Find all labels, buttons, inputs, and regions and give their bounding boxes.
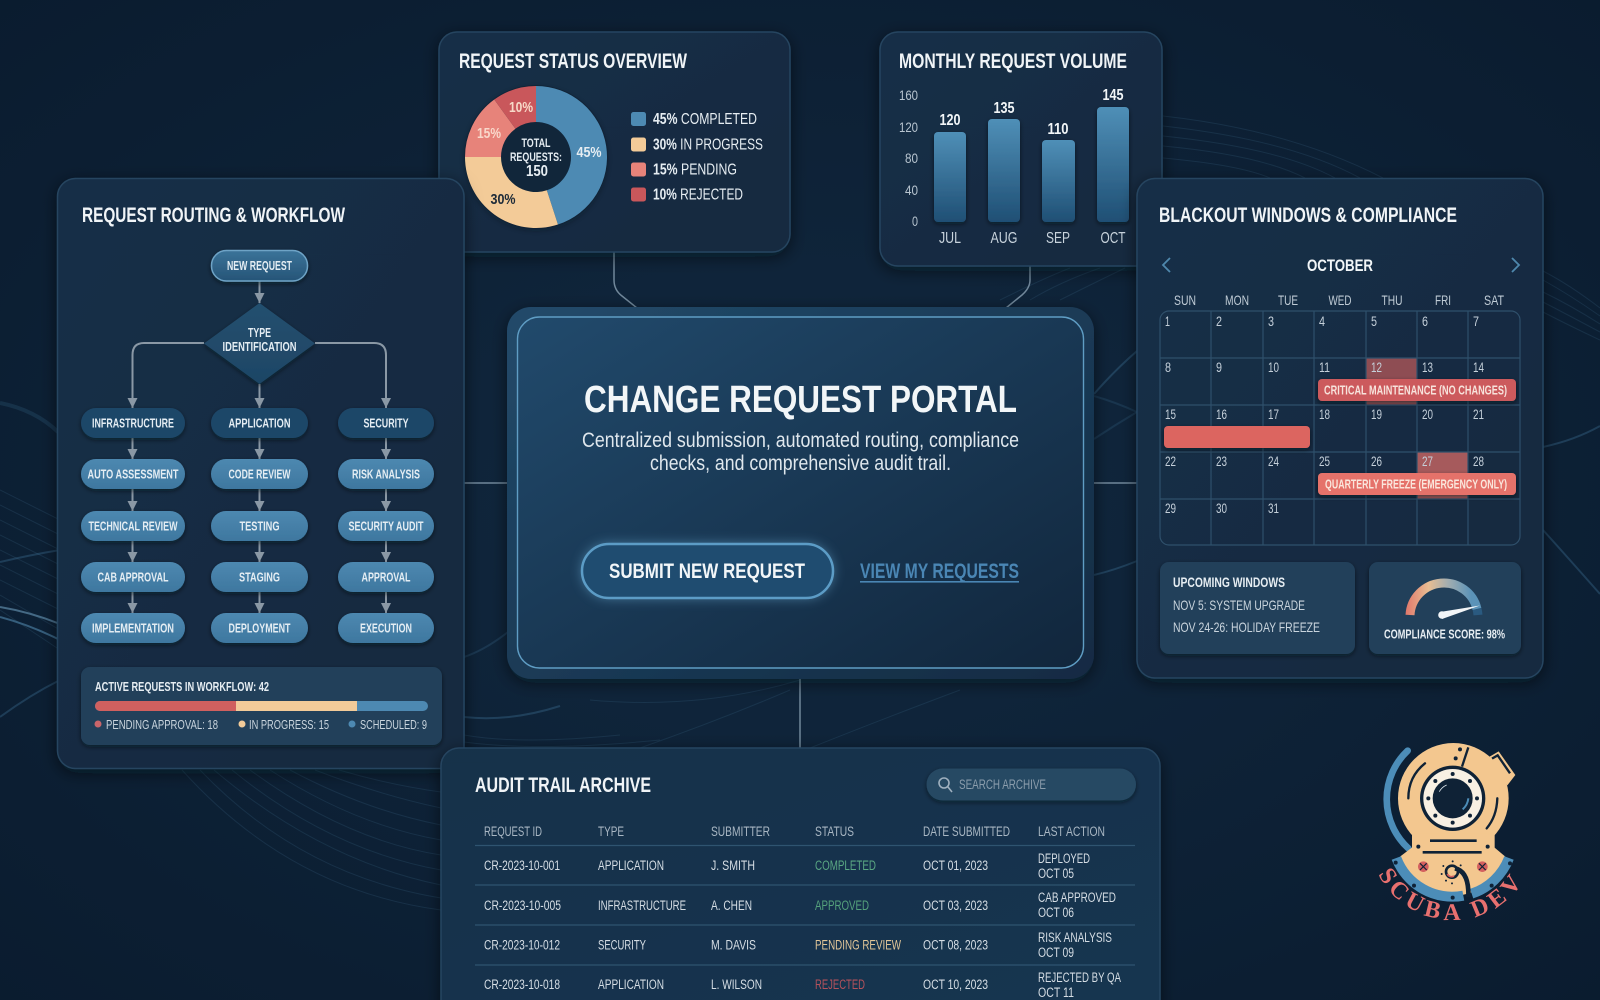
arrows: flow connectors (132, 281, 386, 613)
node: type identification (204, 303, 315, 384)
subtitle: checks, and comprehensive audit trail. (650, 452, 951, 475)
bar chart: AUG (990, 230, 1018, 247)
panel: request routing and workflow (58, 178, 464, 768)
row: CR-2023-10-018: L. WILSON (711, 977, 762, 992)
y axis labels: 0 (912, 213, 918, 229)
column: infrastructure: CAB APPROVAL (98, 570, 169, 584)
blackout: quarterly freeze: QUARTERLY FREEZE (EMERGENCY ONLY) (1325, 478, 1507, 492)
compliance gauge: COMPLIANCE SCORE: 98% (1384, 626, 1505, 642)
column: security: SECURITY AUDIT (348, 520, 424, 534)
subtitle (582, 429, 1019, 475)
column: infrastructure (81, 408, 185, 643)
row: CR-2023-10-001: DEPLOYED (1038, 851, 1090, 866)
row: CR-2023-10-012: SECURITY (598, 938, 646, 952)
table header (484, 824, 1105, 839)
active requests summary: SCHEDULED: 9 (360, 717, 427, 732)
upcoming windows: NOV 24-26: HOLIDAY FREEZE (1173, 619, 1320, 635)
search box (926, 768, 1136, 800)
calendar dates: 25 (1319, 454, 1330, 469)
blackout: critical maintenance: CRITICAL MAINTENANCE (NO CHANGES) (1324, 384, 1507, 398)
weekday headers: TUE (1278, 292, 1298, 308)
logo text: SCUBA DEV (1379, 868, 1518, 920)
audit table (475, 824, 1135, 1000)
active requests summary: ACTIVE REQUESTS IN WORKFLOW: 42 (95, 679, 269, 694)
calendar navigation (1163, 256, 1519, 275)
blackout: critical maintenance (1318, 379, 1516, 401)
button: submit new request: SUBMIT NEW REQUEST (609, 559, 805, 583)
row: CR-2023-10-012: M. DAVIS (711, 938, 756, 952)
donut chart: 10% (509, 99, 533, 116)
row: CR-2023-10-005: APPROVED (815, 898, 869, 913)
bar chart: OCT (1100, 230, 1126, 247)
icon: porthole (1420, 766, 1485, 831)
column: infrastructure: AUTO ASSESSMENT (88, 468, 179, 482)
row: CR-2023-10-012: CR-2023-10-012 (484, 938, 560, 952)
donut chart: 45% (576, 144, 602, 161)
bar chart (899, 87, 1129, 247)
button: submit new request (582, 544, 833, 598)
column: infrastructure: INFRASTRUCTURE (92, 416, 174, 430)
donut chart (464, 85, 608, 229)
donut chart: REQUESTS: (510, 150, 562, 164)
bar chart: JUL (939, 230, 961, 247)
row: CR-2023-10-001: OCT 01, 2023 (923, 858, 988, 873)
calendar dates: 3 (1268, 314, 1274, 329)
chart legend: 15% PENDING (653, 162, 737, 178)
calendar dates: 6 (1422, 314, 1428, 329)
row: CR-2023-10-018: APPLICATION (598, 977, 664, 992)
y axis labels: 40 (905, 182, 918, 198)
row: CR-2023-10-018: OCT 10, 2023 (923, 977, 988, 992)
node: type identification: TYPE (248, 326, 271, 340)
upcoming windows: NOV 5: SYSTEM UPGRADE (1173, 597, 1305, 613)
row: CR-2023-10-001: APPLICATION (598, 858, 664, 873)
row: CR-2023-10-001: CR-2023-10-001 (484, 858, 560, 873)
calendar dates: 29 (1165, 501, 1176, 516)
bar chart: 145 (1102, 87, 1124, 104)
icon: top handle (1488, 751, 1515, 785)
bar chart: SEP (1046, 230, 1070, 247)
row: CR-2023-10-018: REJECTED BY QA (1038, 970, 1121, 985)
calendar dates: 30 (1216, 501, 1227, 516)
weekday headers: MON (1225, 292, 1249, 308)
compliance gauge (1369, 562, 1521, 654)
row: CR-2023-10-005: A. CHEN (711, 898, 752, 913)
y axis labels: 80 (905, 150, 918, 166)
weekday headers: THU (1382, 292, 1402, 308)
logo: scuba dev diving helmet (1379, 743, 1518, 920)
column: application (211, 408, 308, 643)
calendar dates: 28 (1473, 454, 1484, 469)
calendar dates: 4 (1319, 314, 1325, 329)
calendar dates: 5 (1371, 314, 1377, 329)
column: application: CODE REVIEW (228, 468, 291, 482)
column: security: SECURITY (364, 416, 409, 430)
donut chart: 150 (526, 163, 548, 180)
heading: blackout windows and compliance: BLACKOUT WINDOWS & COMPLIANCE (1159, 204, 1457, 227)
node: new request (212, 250, 308, 281)
calendar dates: 19 (1371, 407, 1382, 422)
column: security: RISK ANALYSIS (352, 468, 420, 482)
icon: collar band (1394, 858, 1512, 900)
row: CR-2023-10-012: OCT 09 (1038, 945, 1074, 960)
chart legend: 30% IN PROGRESS (653, 136, 763, 154)
active requests summary: PENDING APPROVAL: 18 (106, 717, 218, 732)
calendar dates: 16 (1216, 407, 1227, 422)
table header: LAST ACTION (1038, 824, 1105, 839)
calendar dates: 11 (1319, 360, 1330, 375)
donut chart: 15% (477, 125, 501, 142)
column: application: APPLICATION (228, 416, 290, 430)
calendar dates: 8 (1165, 360, 1171, 375)
upcoming windows: UPCOMING WINDOWS (1173, 575, 1285, 590)
calendar dates: 17 (1268, 407, 1279, 422)
calendar dates: 7 (1473, 314, 1479, 329)
panel: change request portal hero (507, 307, 1094, 679)
calendar dates: 18 (1319, 407, 1330, 422)
row: CR-2023-10-001: J. SMITH (711, 858, 755, 873)
progress bar (95, 701, 428, 711)
calendar dates: 2 (1216, 314, 1222, 329)
active requests summary (81, 667, 442, 745)
background contour lines (0, 116, 1600, 910)
calendar dates: 26 (1371, 454, 1382, 469)
calendar dates: 31 (1268, 501, 1279, 516)
row: CR-2023-10-012: RISK ANALYSIS (1038, 930, 1112, 945)
column: infrastructure: TECHNICAL REVIEW (88, 520, 178, 534)
connectors between panels (464, 252, 1137, 748)
y axis labels (899, 87, 918, 229)
chart legend: 45% COMPLETED (653, 111, 757, 128)
calendar navigation: OCTOBER (1307, 256, 1373, 275)
calendar dates: 24 (1268, 454, 1279, 469)
calendar grid (1160, 311, 1520, 545)
table header: REQUEST ID (484, 824, 542, 839)
subtitle: Centralized submission, automated routing, compliance (582, 429, 1019, 452)
icon: search (939, 778, 952, 792)
y axis labels: 120 (899, 119, 918, 135)
icon: valves (1418, 861, 1488, 872)
calendar dates: 27 (1422, 454, 1433, 469)
row: CR-2023-10-012: PENDING REVIEW (815, 938, 901, 952)
heading: request routing and workflow: REQUEST ROUTING & WORKFLOW (82, 204, 345, 227)
column: application: DEPLOYMENT (228, 622, 291, 636)
row: CR-2023-10-001 (484, 851, 1090, 881)
calendar dates: 22 (1165, 454, 1176, 469)
table header: TYPE (598, 824, 624, 839)
chart legend: 10% REJECTED (653, 186, 743, 204)
row: CR-2023-10-018: CR-2023-10-018 (484, 977, 560, 992)
panel: audit trail archive (441, 748, 1160, 1000)
weekday headers: SUN (1174, 292, 1196, 308)
title: CHANGE REQUEST PORTAL (584, 379, 1017, 421)
heading: monthly request volume: MONTHLY REQUEST VOLUME (899, 50, 1127, 73)
row: CR-2023-10-001: OCT 05 (1038, 866, 1074, 881)
row: CR-2023-10-018: OCT 11 (1038, 985, 1074, 1000)
row: CR-2023-10-005: INFRASTRUCTURE (598, 898, 686, 913)
calendar dates: 21 (1473, 407, 1484, 422)
heading: audit trail archive: AUDIT TRAIL ARCHIVE (475, 774, 651, 797)
calendar dates: 12 (1371, 360, 1382, 375)
row: CR-2023-10-005: OCT 03, 2023 (923, 898, 988, 913)
panel: blackout windows and compliance (1137, 178, 1543, 678)
row: CR-2023-10-012 (484, 930, 1112, 960)
weekday headers: WED (1328, 292, 1352, 308)
icon: air valve and hose (1441, 860, 1468, 897)
row: CR-2023-10-018 (484, 970, 1121, 1000)
weekday headers (1174, 292, 1504, 308)
calendar dates (1165, 314, 1484, 516)
blackout: unlabeled window (1164, 426, 1310, 448)
calendar dates: 23 (1216, 454, 1227, 469)
bar chart: 135 (994, 100, 1015, 117)
table header: STATUS (815, 824, 854, 839)
node: new request: NEW REQUEST (227, 259, 292, 273)
column: security: EXECUTION (360, 622, 412, 636)
node: type identification: IDENTIFICATION (222, 340, 296, 354)
row: CR-2023-10-001: COMPLETED (815, 858, 876, 873)
column: application: TESTING (240, 520, 280, 534)
column: infrastructure: IMPLEMENTATION (92, 622, 174, 636)
column: security: APPROVAL (362, 570, 411, 584)
row: CR-2023-10-005: OCT 06 (1038, 905, 1074, 920)
table header: SUBMITTER (711, 824, 770, 839)
calendar highlighted days (1366, 358, 1468, 499)
weekday headers: SAT (1484, 292, 1504, 308)
calendar (1160, 256, 1520, 545)
calendar dates: 15 (1165, 407, 1176, 422)
upcoming windows (1160, 562, 1355, 654)
panel: request status overview (439, 32, 790, 252)
row: CR-2023-10-005: CR-2023-10-005 (484, 898, 561, 913)
panel: monthly request volume (880, 32, 1162, 266)
column: application: STAGING (239, 570, 280, 584)
calendar dates: 20 (1422, 407, 1433, 422)
chart legend (631, 111, 763, 204)
active requests summary: IN PROGRESS: 15 (249, 717, 329, 732)
bar chart: 110 (1048, 121, 1069, 138)
calendar dates: 13 (1422, 360, 1433, 375)
row: CR-2023-10-018: REJECTED (815, 977, 865, 992)
row: CR-2023-10-012: OCT 08, 2023 (923, 938, 988, 952)
weekday headers: FRI (1435, 292, 1451, 308)
heading: request status overview: REQUEST STATUS OVERVIEW (459, 50, 687, 73)
column: security (338, 408, 434, 643)
bar chart: 120 (940, 112, 961, 129)
icon: left blue arc (1387, 751, 1408, 848)
calendar dates: 1 (1165, 314, 1170, 329)
y axis labels: 160 (899, 87, 918, 103)
blackout: quarterly freeze (1318, 473, 1516, 495)
flowchart (81, 250, 434, 643)
icon: helmet body (1398, 743, 1509, 896)
calendar dates: 10 (1268, 360, 1279, 375)
donut chart: 30% (490, 191, 516, 208)
link: view my requests: VIEW MY REQUESTS (860, 560, 1019, 583)
calendar dates: 9 (1216, 360, 1222, 375)
table header: DATE SUBMITTED (923, 824, 1010, 839)
row: CR-2023-10-005 (484, 890, 1116, 920)
donut chart: TOTAL (522, 136, 550, 150)
calendar dates: 14 (1473, 360, 1484, 375)
search box: SEARCH ARCHIVE (959, 777, 1046, 792)
row: CR-2023-10-005: CAB APPROVED (1038, 890, 1116, 905)
